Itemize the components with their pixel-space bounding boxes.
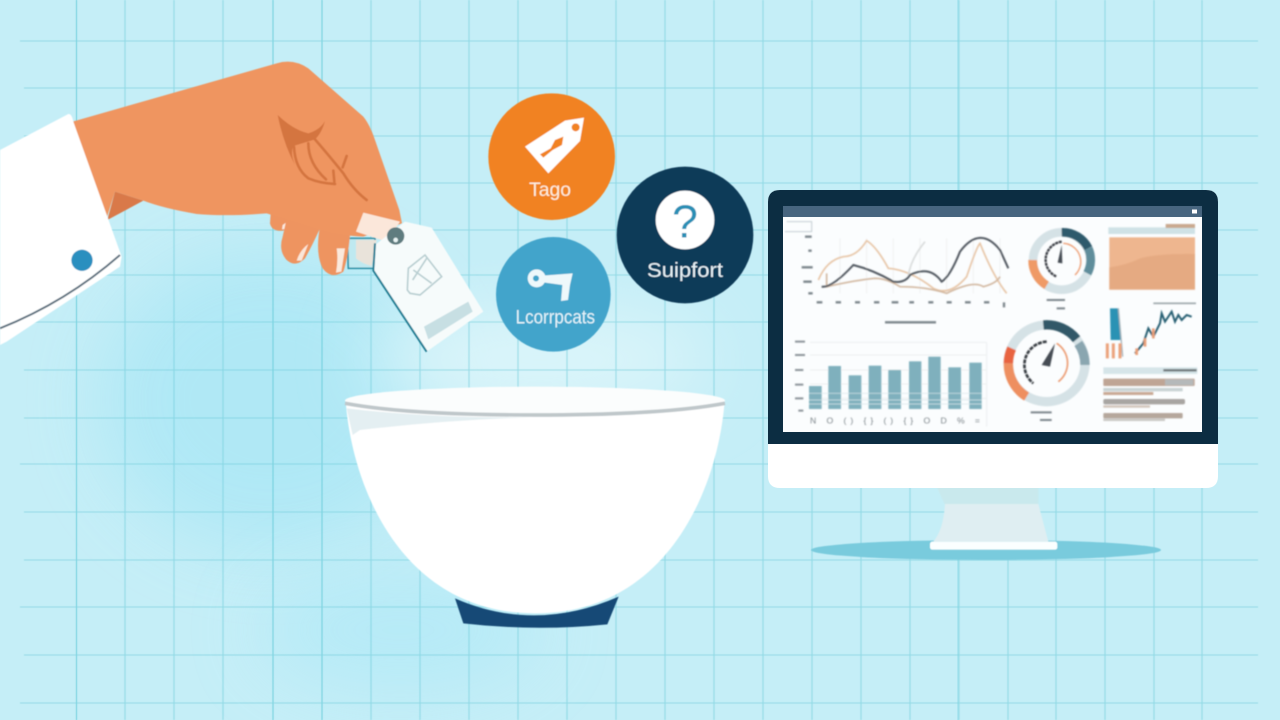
gauge small [1033,232,1091,308]
dashboard content [785,222,1197,427]
monitor body [768,190,1218,488]
bar chart: N O () {} () {} O D % = [810,415,980,425]
lower fingers [270,213,377,275]
icon: key [528,269,573,301]
icon: tag [525,118,584,173]
hand vein mark [278,115,367,200]
icon circle: tags: Tago [529,180,571,201]
wrist shadow [107,192,143,220]
line chart [785,222,1008,322]
bowl [345,387,725,628]
icon circle: key: Lcorrpcats [516,307,595,328]
icon circle: support [617,167,753,303]
gauge large [1008,325,1085,420]
shirt cuff [0,114,122,345]
tag loop behind fingers [347,238,375,268]
price tag [373,222,483,352]
hand body [73,62,402,237]
screen [783,206,1202,432]
hand holding tag [0,62,483,352]
bowl body [346,405,724,613]
bowl foot [455,597,619,628]
bowl inner shadow [347,408,530,435]
monitor stand [811,487,1161,560]
bar list panel [1103,367,1197,421]
icon: question mark: ? [672,196,698,248]
spark chart [1107,303,1196,358]
computer monitor [768,190,1218,560]
bar chart [795,342,987,427]
icon circle: tags [488,93,615,220]
icon circle: support: Suipfort [647,260,723,282]
bowl rim [345,387,725,415]
area panel [1108,224,1195,290]
thumb nail [356,213,400,242]
icon circle: key [496,237,611,352]
